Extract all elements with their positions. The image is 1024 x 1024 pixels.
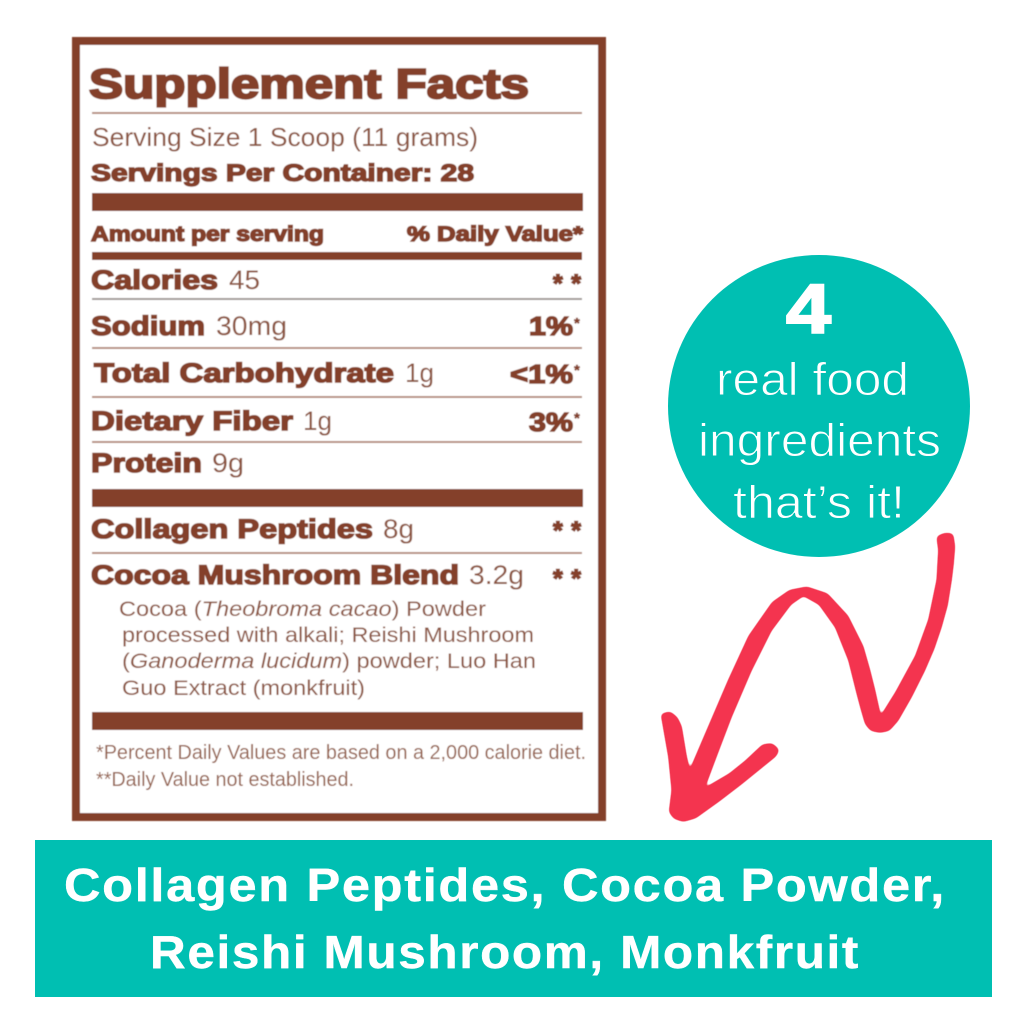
callout: 4 real food ingredients: that’s it! <box>733 476 905 528</box>
row: cocoa mushroom blend: 3.2g <box>469 560 524 590</box>
text: footnotes: *Percent Daily Values are based on a 2,000 calorie diet. <box>96 742 586 764</box>
text: blend ingredients: Guo Extract (monkfruit) <box>122 676 365 700</box>
text: footnotes: **Daily Value not established. <box>96 769 354 791</box>
row: calories: ** <box>553 270 581 298</box>
row: sodium: * <box>574 315 580 332</box>
row: cocoa mushroom blend: Cocoa Mushroom Blend <box>91 560 459 590</box>
row: dietary fiber: 3% <box>529 407 573 437</box>
row: protein <box>91 448 244 478</box>
callout: 4 real food ingredients: ingredients <box>698 414 941 466</box>
arrow <box>663 535 953 820</box>
row: total carbohydrate: <1% <box>510 359 573 389</box>
banner: ingredient list: Reishi Mushroom, Monkfruit <box>150 926 860 978</box>
row: total carbohydrate: * <box>574 362 580 379</box>
row: calories: 45 <box>229 265 260 295</box>
text: blend ingredients <box>119 597 536 700</box>
callout: 4 real food ingredients: 4 <box>786 270 831 348</box>
row: dietary fiber <box>91 406 580 437</box>
row: collagen peptides: Collagen Peptides <box>91 514 373 544</box>
row: dietary fiber: Dietary Fiber <box>91 406 294 436</box>
callout: 4 real food ingredients: real food <box>716 353 909 405</box>
row: sodium: 1% <box>529 311 573 341</box>
callout: 4 real food ingredients <box>668 255 970 557</box>
row: dietary fiber: 1g <box>303 406 332 436</box>
text: blend ingredients: Cocoa ( Theobroma cacao ) Powder <box>119 597 486 621</box>
row: total carbohydrate <box>94 358 580 389</box>
row: protein: Protein <box>91 448 202 478</box>
row: collagen peptides: ** <box>553 517 581 545</box>
heading: Supplement Facts: Supplement Facts <box>89 60 529 107</box>
text: footnotes <box>96 742 586 791</box>
row: protein: 9g <box>212 448 244 478</box>
banner: ingredient list: Collagen Peptides, Cocoa Powder, <box>64 859 946 911</box>
banner: ingredient list <box>35 840 992 997</box>
text: percent daily value: % Daily Value* <box>407 223 584 246</box>
row: sodium: Sodium <box>91 311 205 341</box>
row: dietary fiber: * <box>574 410 580 427</box>
text: blend ingredients: (Ganoderma lucidum ) powder; Luo Han <box>122 649 536 673</box>
row: cocoa mushroom blend: ** <box>553 565 581 593</box>
row: total carbohydrate: Total Carbohydrate <box>94 358 394 388</box>
row: collagen peptides <box>91 514 581 545</box>
row: sodium: 30mg <box>216 311 287 341</box>
row: total carbohydrate: 1g <box>405 358 434 388</box>
text: blend ingredients: processed with alkali; Reishi Mushroom <box>122 623 534 647</box>
row: collagen peptides: 8g <box>383 514 414 544</box>
row: sodium <box>91 311 580 341</box>
row: calories: Calories <box>91 265 218 295</box>
row: cocoa mushroom blend <box>91 560 581 593</box>
text: serving size: Serving Size 1 Scoop (11 grams) <box>92 122 478 152</box>
panel: supplement facts label <box>76 41 602 817</box>
row: calories <box>91 265 581 298</box>
text: servings per container: Servings Per Container: 28 <box>91 160 474 187</box>
text: amount per serving: Amount per serving <box>91 223 324 246</box>
